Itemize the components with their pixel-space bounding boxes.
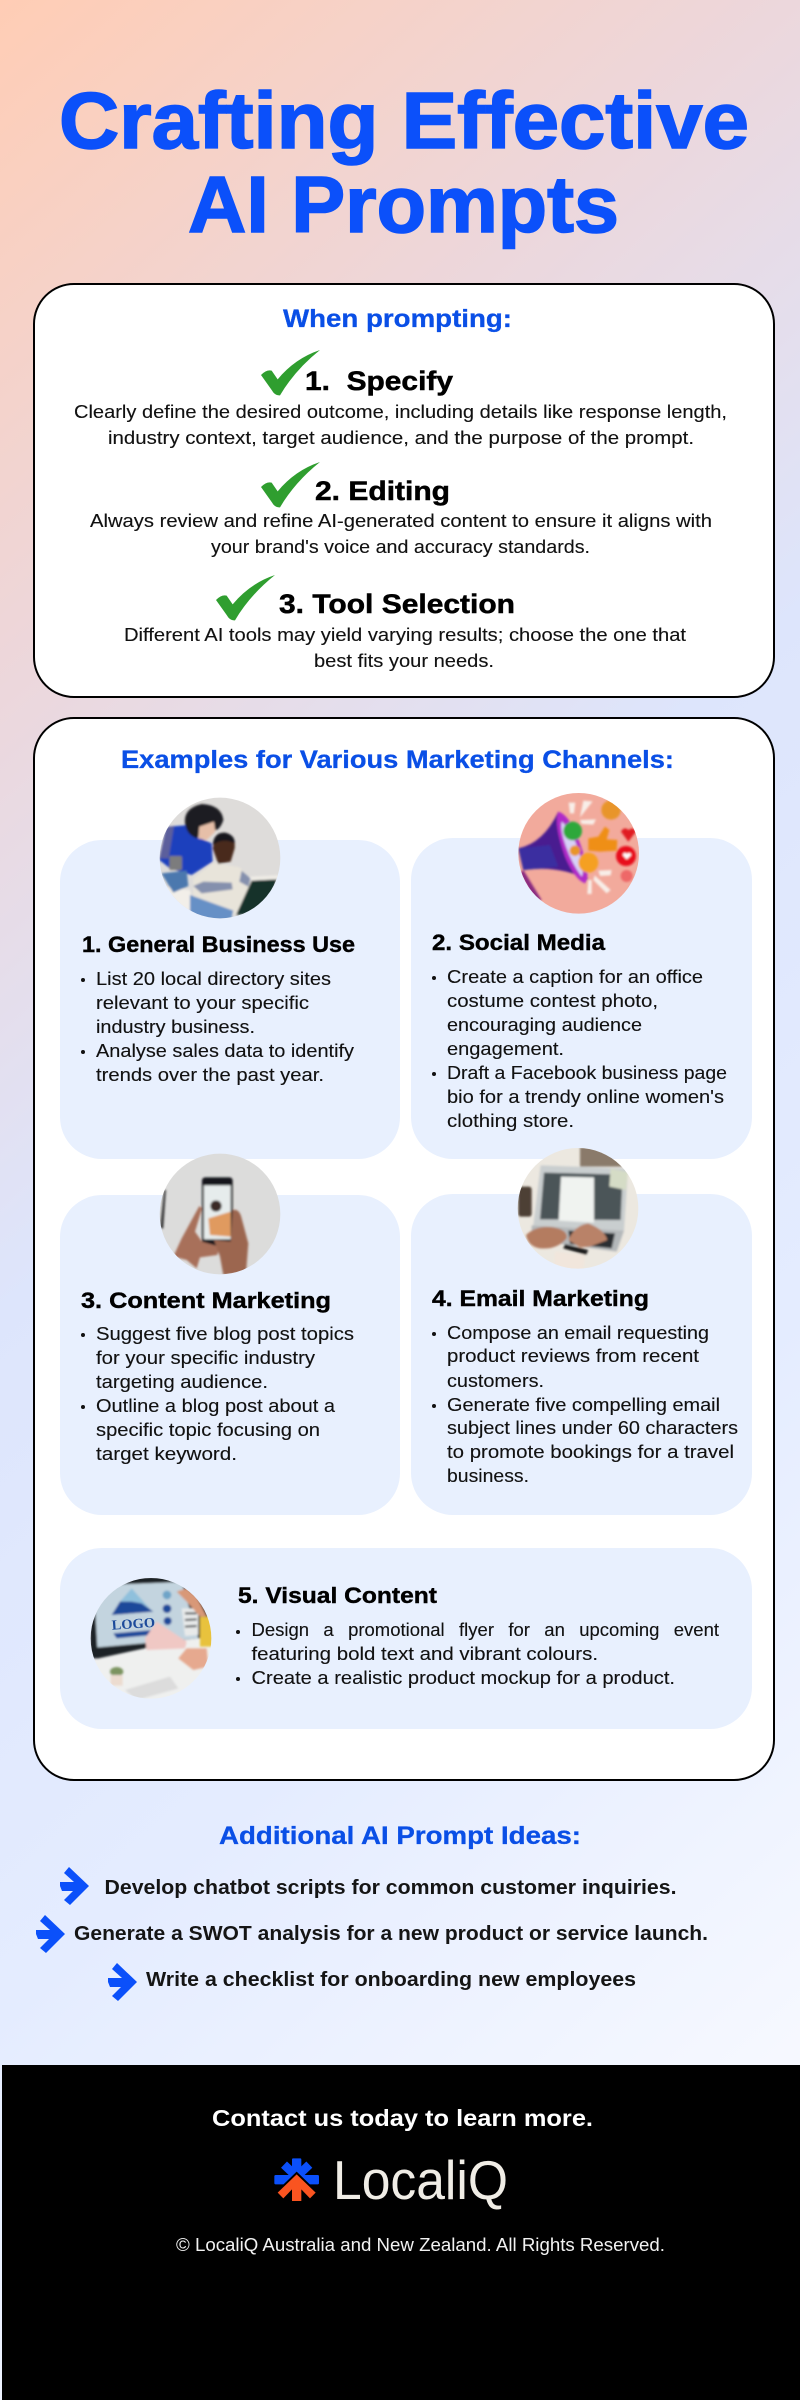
panel: when prompting	[34, 284, 774, 697]
card: content marketing	[60, 1150, 400, 1515]
icon: green check 2	[261, 462, 320, 507]
bullet list: subject lines under 60 characters	[447, 1418, 738, 1438]
card: general business use	[60, 793, 400, 1159]
logo word on monitor: LOGO	[111, 1616, 156, 1634]
logo word: LocaliQ	[333, 2149, 508, 2211]
bullet list: Analyse sales data to identify	[96, 1041, 354, 1061]
heading: examples: Examples for Various Marketing Channels:	[121, 746, 674, 774]
idea 3: Write a checklist for onboarding new employees	[146, 1969, 636, 1991]
bullet list: Compose an email requesting	[447, 1323, 709, 1343]
logo icon	[274, 2158, 319, 2203]
photo: megaphone with reactions	[517, 790, 643, 917]
card background	[411, 1194, 752, 1515]
title: AI Prompts	[188, 160, 619, 249]
item 3 text: best fits your needs.	[314, 651, 494, 671]
bullet list: customers.	[447, 1371, 544, 1391]
bullet list: trends over the past year.	[96, 1065, 324, 1085]
icon: arrow 1	[60, 1867, 89, 1905]
icon: arrow 2	[36, 1915, 65, 1953]
bullet list: Generate five compelling email	[447, 1395, 720, 1415]
panel: marketing channel examples	[34, 718, 774, 1780]
bullet list: product reviews from recent	[447, 1346, 699, 1366]
footer	[2, 2065, 800, 2400]
bullet list	[236, 1620, 719, 1688]
bullet list	[432, 967, 727, 1131]
bullet list: Create a caption for an office	[447, 967, 703, 987]
icon: green check 1	[261, 350, 320, 395]
card: email marketing	[411, 1145, 752, 1515]
icon: arrow 3	[108, 1963, 137, 2001]
heading: when prompting: When prompting:	[283, 305, 512, 333]
bullet list: industry business.	[96, 1017, 255, 1037]
bullet list: costume contest photo,	[447, 991, 658, 1011]
card background	[60, 1195, 400, 1515]
card heading: 2. Social Media	[432, 930, 606, 955]
card heading: 1. General Business Use	[82, 932, 355, 957]
bullet list: encouraging audience	[447, 1015, 642, 1035]
bullet list	[432, 1323, 738, 1486]
photo: logo design on monitor	[90, 1578, 212, 1698]
bullet list: featuring bold text and vibrant colours.	[252, 1644, 598, 1664]
item 2 heading: 2. Editing	[315, 476, 450, 506]
bullet list: relevant to your specific	[96, 993, 309, 1013]
card background	[60, 840, 400, 1159]
bullet list: List 20 local directory sites	[96, 969, 331, 989]
item 3 heading: 3. Tool Selection	[279, 589, 515, 619]
item 1 text	[74, 402, 727, 448]
photo: couple with laptop	[160, 798, 280, 918]
copyright: © LocaliQ Australia and New Zealand. All Rights Reserved.	[176, 2235, 665, 2255]
bullet list: to promote bookings for a travel	[447, 1442, 734, 1462]
title	[59, 76, 749, 249]
bullet list: Draft a Facebook business page	[447, 1063, 727, 1083]
item 3 text	[124, 625, 686, 671]
panel background	[34, 284, 774, 697]
card: social media	[411, 790, 752, 1159]
item 2 text: Always review and refine AI-generated content to ensure it aligns with	[90, 511, 712, 531]
bullet list: engagement.	[447, 1039, 564, 1059]
heading: additional ideas: Additional AI Prompt Ideas:	[219, 1822, 581, 1850]
photo: typing on laptop	[515, 1145, 642, 1272]
item 1 heading: 1. Specify	[305, 366, 453, 396]
item 1 text: industry context, target audience, and the purpose of the prompt.	[108, 428, 694, 448]
photo: hands holding phone	[160, 1154, 280, 1274]
card heading: 5. Visual Content	[238, 1583, 438, 1608]
bullet list: targeting audience.	[96, 1372, 268, 1392]
bullet list	[81, 969, 354, 1085]
title: Crafting Effective	[59, 76, 749, 165]
idea 1: Develop chatbot scripts for common customer inquiries.	[104, 1877, 676, 1899]
logo: LocaliQ	[274, 2149, 508, 2211]
icon: green check 3	[216, 575, 275, 620]
bullet list: specific topic focusing on	[96, 1420, 320, 1440]
idea 2: Generate a SWOT analysis for a new product or service launch.	[74, 1923, 708, 1945]
panel background	[34, 718, 774, 1780]
section: additional prompt ideas	[36, 1822, 708, 2001]
bullet list: for your specific industry	[96, 1348, 315, 1368]
footer background	[2, 2065, 800, 2400]
item 3 text: Different AI tools may yield varying results; choose the one that	[124, 625, 686, 645]
bullet list: Suggest five blog post topics	[96, 1324, 354, 1344]
card background	[411, 838, 752, 1159]
call to action: Contact us today to learn more.	[212, 2105, 593, 2131]
card background	[60, 1548, 752, 1729]
item 1 text: Clearly define the desired outcome, including details like response length,	[74, 402, 727, 422]
bullet list: Design a promotional flyer for an upcoming event	[252, 1620, 719, 1640]
bullet list: business.	[447, 1466, 529, 1486]
bullet list: target keyword.	[96, 1444, 237, 1464]
bullet list	[81, 1324, 354, 1464]
bullet list: Outline a blog post about a	[96, 1396, 336, 1416]
bullet list: clothing store.	[447, 1111, 574, 1131]
item 2 text: your brand's voice and accuracy standards.	[211, 537, 590, 557]
bullet list: Create a realistic product mockup for a product.	[252, 1668, 675, 1688]
bullet list: bio for a trendy online women's	[447, 1087, 724, 1107]
card: visual content	[60, 1548, 752, 1729]
card heading: 4. Email Marketing	[432, 1286, 649, 1311]
card heading: 3. Content Marketing	[81, 1288, 331, 1313]
item 2 text	[90, 511, 712, 557]
